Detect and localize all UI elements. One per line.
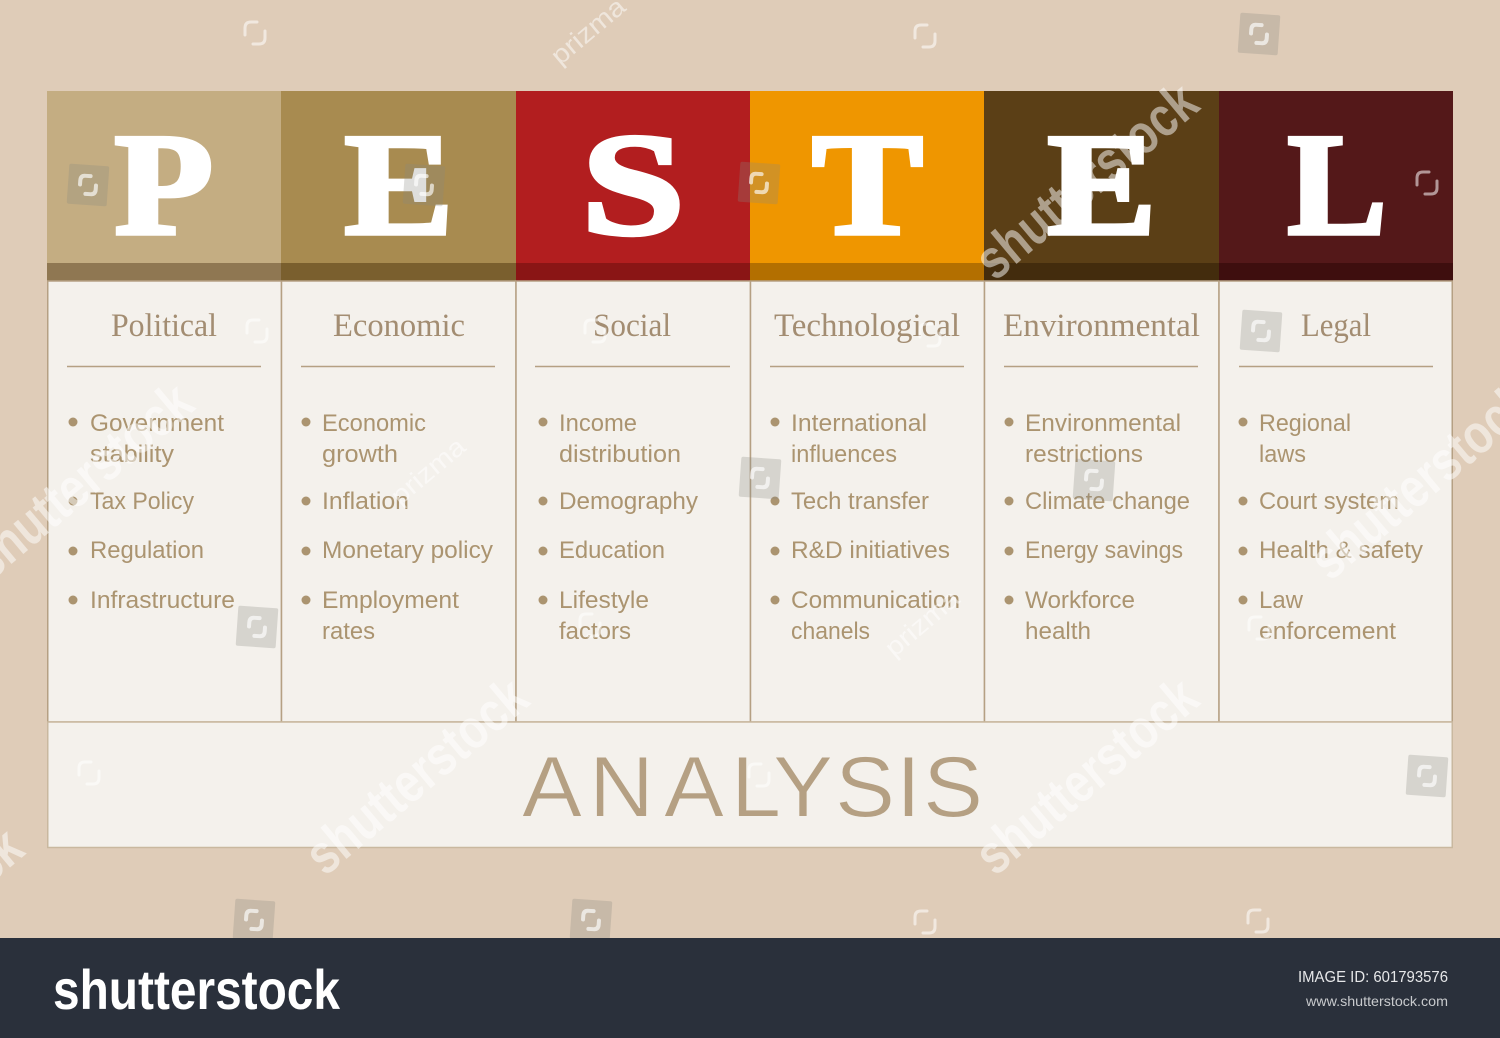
- list: Economic: rates: [322, 618, 375, 645]
- list: Legal: [1238, 410, 1423, 645]
- letter E: E: [344, 105, 453, 266]
- heading: Technological: Technological: [774, 308, 960, 344]
- watermark: shutterstock: [292, 664, 540, 886]
- list: Social: Lifestyle: [559, 587, 649, 614]
- footer bar: [0, 938, 1500, 1038]
- list: Technological: Tech transfer: [791, 488, 929, 515]
- list: Legal: laws: [1259, 441, 1306, 468]
- panel: Political: [47, 91, 282, 722]
- panel: Analysis: [48, 722, 1452, 848]
- list: Technological: influences: [791, 441, 897, 468]
- heading: Environmental: Environmental: [1003, 308, 1200, 344]
- heading: Economic: Economic: [333, 308, 465, 344]
- panel: Environmental: [984, 91, 1219, 722]
- letter P: P: [114, 105, 213, 266]
- website: www.shutterstock.com: [1305, 993, 1448, 1009]
- list: Political: [68, 410, 235, 614]
- list: Technological: chanels: [791, 618, 870, 645]
- list: Political: Regulation: [90, 537, 204, 564]
- footer logo: shutterstock: [53, 958, 341, 1021]
- list: Environmental: health: [1025, 618, 1091, 645]
- letter L: L: [1288, 104, 1387, 265]
- list: Environmental: [1004, 410, 1190, 645]
- list: Economic: growth: [322, 441, 398, 468]
- list: Environmental: restrictions: [1025, 441, 1143, 468]
- letter T: T: [812, 104, 923, 265]
- list: Economic: [302, 410, 493, 645]
- panel: Social: [516, 91, 750, 722]
- panel: Technological: [750, 91, 984, 722]
- list: Technological: R&D initiatives: [791, 537, 950, 564]
- list: Legal: Court system: [1259, 488, 1399, 515]
- watermark: prizma: [879, 583, 966, 663]
- image id: IMAGE ID: 601793576: [1298, 969, 1448, 986]
- list: Political: stability: [90, 441, 174, 468]
- panel: Economic: [281, 91, 516, 722]
- list: Legal: Health & safety: [1259, 537, 1423, 564]
- list: Environmental: Environmental: [1025, 410, 1181, 437]
- list: Environmental: Climate change: [1025, 488, 1190, 515]
- list: Social: distribution: [559, 441, 681, 468]
- watermark: shutterstock: [962, 664, 1210, 886]
- list: Environmental: Energy savings: [1025, 537, 1183, 564]
- heading: Social: Social: [593, 308, 671, 344]
- heading: Political: Political: [111, 308, 217, 344]
- list: Technological: International: [791, 410, 927, 437]
- list: Economic: Inflation: [322, 488, 409, 515]
- list: Political: Tax Policy: [90, 488, 194, 515]
- list: Political: Infrastructure: [90, 587, 235, 614]
- list: Economic: Economic: [322, 410, 426, 437]
- heading: Legal: Legal: [1301, 308, 1371, 344]
- list: Legal: enforcement: [1259, 618, 1396, 645]
- list: Legal: Law: [1259, 587, 1304, 614]
- list: Social: factors: [559, 618, 631, 645]
- heading: ANALYSIS: ANALYSIS: [522, 738, 983, 835]
- list: Economic: Employment: [322, 587, 459, 614]
- watermark: shutterstock: [962, 69, 1210, 291]
- list: Social: Income: [559, 410, 637, 437]
- list: Technological: Communication: [791, 587, 960, 614]
- list: Political: Government: [90, 410, 224, 437]
- list: Environmental: Workforce: [1025, 587, 1135, 614]
- list: Legal: Regional: [1259, 410, 1351, 437]
- list: Social: Demography: [559, 488, 698, 515]
- list: Economic: Monetary policy: [322, 537, 493, 564]
- list: Technological: [770, 410, 960, 645]
- list: Social: Education: [559, 537, 665, 564]
- panel: Legal: [1219, 91, 1453, 722]
- letter S: S: [582, 104, 685, 266]
- letter E: E: [1048, 105, 1156, 266]
- watermark: prizma: [385, 431, 472, 511]
- list: Social: [538, 410, 698, 645]
